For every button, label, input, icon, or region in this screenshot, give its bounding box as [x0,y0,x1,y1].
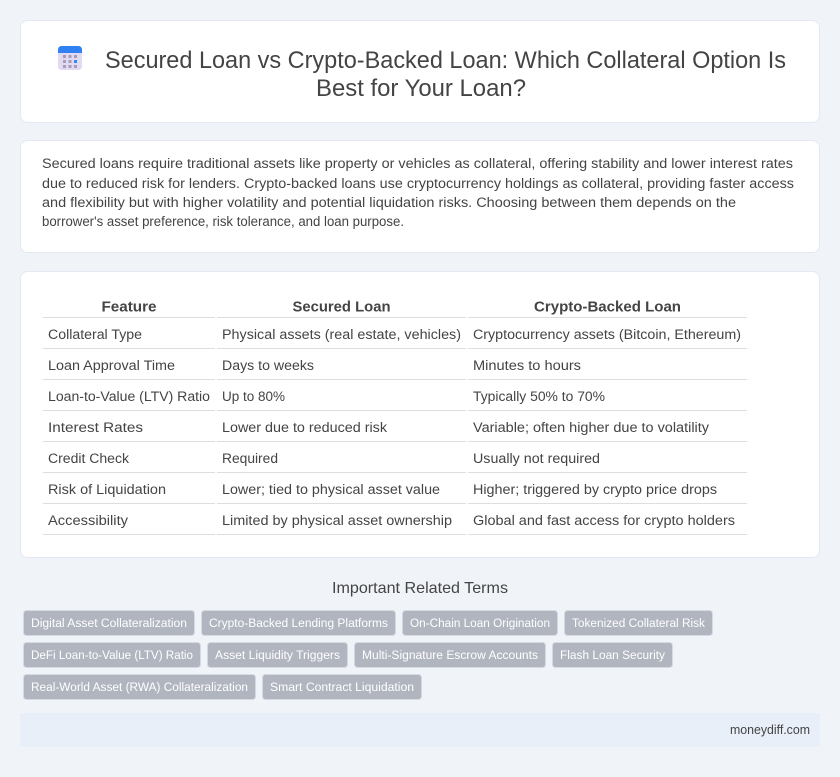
text block: summary: Secured loans require traditional assets like property or vehicles as collateral, offering stability and lower interest rates [42,156,793,172]
row: accessibility [48,513,735,529]
text block: summary: and flexibility but with higher volatility and potential liquidation risks. Choosing between them depends on the [42,195,736,211]
tags: related terms: Tokenized Collateral Risk [572,616,706,630]
row: interest rates: Lower due to reduced risk [222,420,388,436]
row: risk of liquidation: Risk of Liquidation [48,482,166,498]
tags: related terms: On-Chain Loan Origination [410,616,550,630]
row: risk of liquidation [48,482,717,498]
row: collateral type: Collateral Type [48,327,142,343]
tags: related terms: Crypto-Backed Lending Platforms [209,616,388,630]
title [105,47,786,102]
panel: summary paragraph [20,140,820,252]
row: accessibility: Limited by physical asset ownership [222,513,452,529]
row: approval time: Days to weeks [222,358,314,374]
row: risk of liquidation: Higher; triggered by crypto price drops [473,482,717,498]
table header: Crypto-Backed Loan [534,298,681,316]
row: credit check: Usually not required [473,451,600,467]
row: LTV ratio [48,389,605,405]
text block: summary: borrower's asset preference, risk tolerance, and loan purpose. [42,214,404,230]
footer [20,713,820,747]
text block: summary: due to reduced risk for lenders. Crypto-backed loans use cryptocurrency holdings as collateral, providing faster access [42,176,794,192]
panel: comparison table [20,272,820,558]
title: Secured Loan vs Crypto-Backed Loan: Which Collateral Option Is [105,47,786,74]
tags: related terms: Flash Loan Security [560,648,666,662]
text block: summary [42,156,794,230]
tags: related terms: DeFi Loan-to-Value (LTV) Ratio [31,648,193,662]
row: risk of liquidation: Lower; tied to physical asset value [222,482,440,498]
row: credit check: Required [222,451,278,467]
row: interest rates: Variable; often higher due to volatility [473,420,710,436]
tags: related terms: Multi-Signature Escrow Accounts [362,648,538,662]
row: interest rates [48,420,710,436]
row: collateral type [48,327,741,343]
heading: related terms: Important Related Terms [332,580,508,597]
row: interest rates: Interest Rates [48,420,143,436]
row: credit check: Credit Check [48,451,130,467]
table header [102,298,681,316]
row: approval time [48,358,581,374]
row: credit check [48,451,600,467]
table header: Feature [102,298,156,316]
icon: calendar [58,46,82,70]
row: collateral type: Physical assets (real estate, vehicles) [222,327,461,343]
title: Best for Your Loan? [316,75,526,102]
table header: Secured Loan [292,298,390,316]
row: approval time: Minutes to hours [473,358,581,374]
tags: related terms: Digital Asset Collateralization [31,616,187,630]
tags: related terms: Smart Contract Liquidation [270,680,414,694]
row: collateral type: Cryptocurrency assets (Bitcoin, Ethereum) [473,327,741,343]
footer: moneydiff.com [730,723,810,737]
row: LTV ratio: Loan-to-Value (LTV) Ratio [48,389,210,405]
tags: related terms: Real-World Asset (RWA) Collateralization [31,680,248,694]
row: accessibility: Accessibility [48,513,129,529]
row: LTV ratio: Up to 80% [222,389,285,405]
panel: title header [20,20,820,122]
row: approval time: Loan Approval Time [48,358,175,374]
row: LTV ratio: Typically 50% to 70% [473,389,605,405]
tags: related terms: Asset Liquidity Triggers [215,648,340,662]
row: accessibility: Global and fast access for crypto holders [473,513,735,529]
tags: related terms [24,610,712,700]
